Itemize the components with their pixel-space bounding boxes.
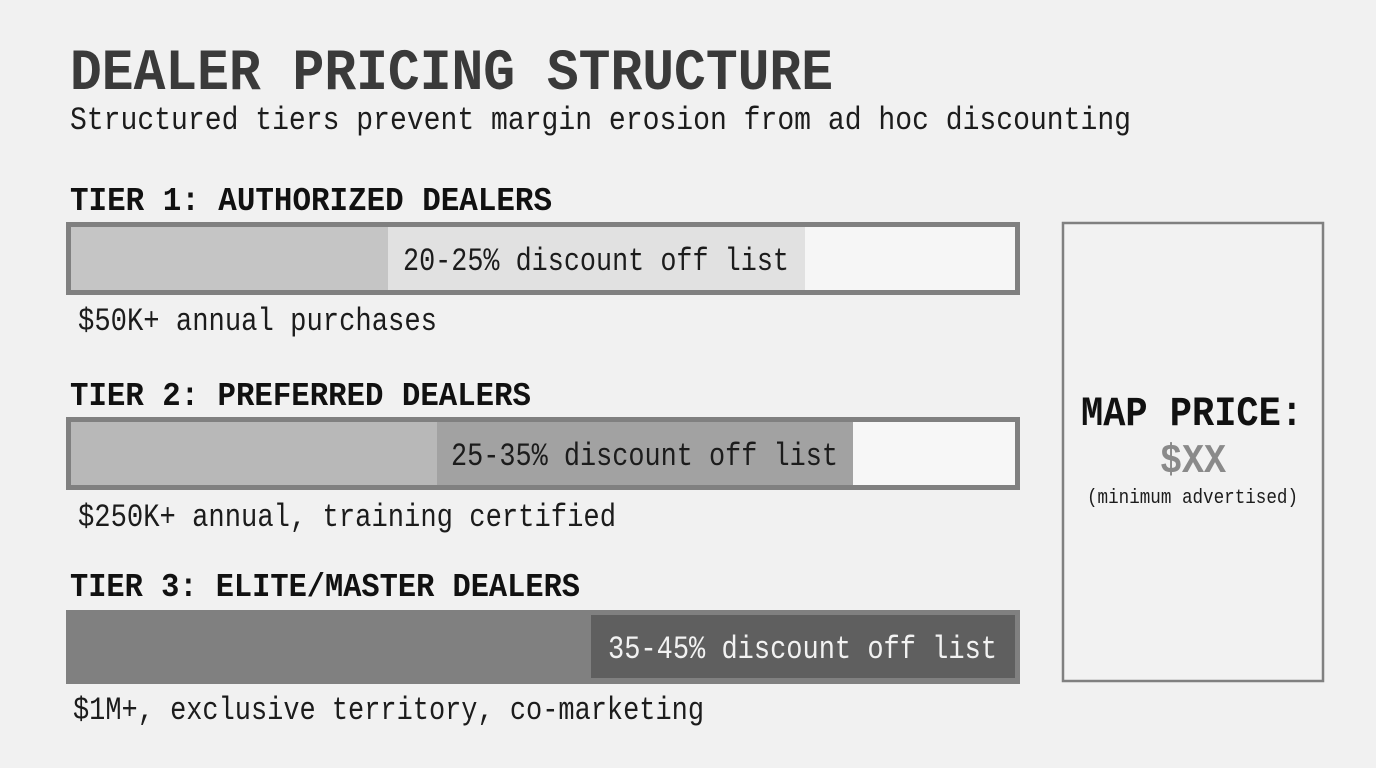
tier 3 requirement: $1M+, exclusive territory, co-marketing	[73, 692, 704, 729]
panel: tier 2	[66, 378, 1020, 536]
tier 1 heading: TIER 1: AUTHORIZED DEALERS	[70, 183, 552, 220]
MAP price note: (minimum advertised)	[1087, 487, 1298, 510]
panel: tier 3	[66, 569, 1020, 729]
MAP price label: MAP PRICE:	[1081, 390, 1303, 438]
tier 2 requirement: $250K+ annual, training certified	[78, 499, 616, 536]
title: DEALER PRICING STRUCTURE	[70, 42, 833, 107]
tier 3 bar	[66, 610, 1020, 684]
tier 2 discount label: 25-35% discount off list	[451, 438, 838, 475]
panel: tier 1	[66, 183, 1020, 340]
tier 1 requirement: $50K+ annual purchases	[78, 303, 437, 340]
tier 1 bar	[66, 222, 1020, 295]
MAP price value: $XX	[1160, 439, 1226, 485]
tier 1 discount label: 20-25% discount off list	[403, 243, 789, 280]
panel: MAP price	[1063, 223, 1323, 681]
tier 2 bar	[66, 417, 1020, 490]
tier 3 discount label: 35-45% discount off list	[608, 631, 997, 668]
subtitle: Structured tiers prevent margin erosion from ad hoc discounting	[70, 102, 1131, 139]
tier 3 heading: TIER 3: ELITE/MASTER DEALERS	[70, 569, 580, 606]
tier 2 heading: TIER 2: PREFERRED DEALERS	[70, 378, 531, 415]
